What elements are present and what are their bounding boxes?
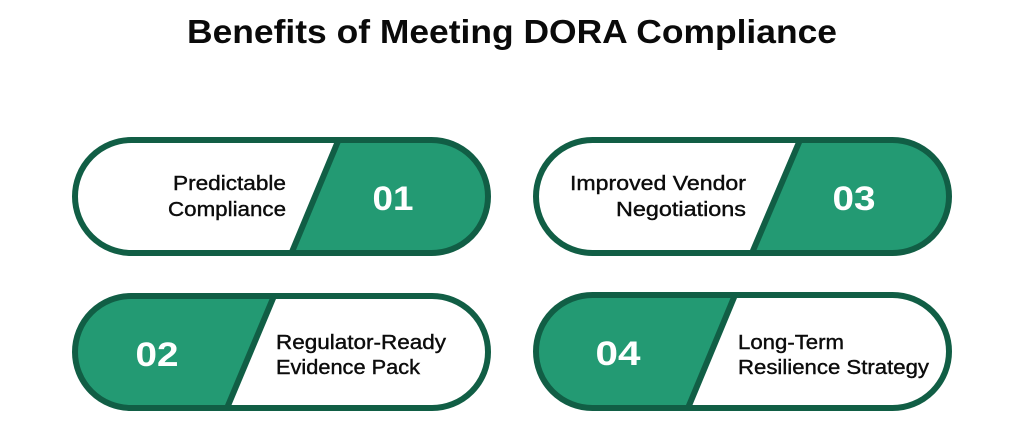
label: Regulator-Ready Evidence Pack [276,332,446,379]
label: Regulator-Ready Evidence Pack: Evidence Pack [276,357,421,379]
panel: 01 Predictable Compliance [75,140,488,253]
panel: 04 Long-Term Resilience Strategy [536,295,949,408]
label: Improved Vendor Negotiations: Negotiations [616,199,746,221]
label: Predictable Compliance: Compliance [168,199,286,221]
label: Predictable Compliance [168,173,286,221]
title: Benefits of Meeting DORA Compliance [187,13,837,50]
label: Improved Vendor Negotiations [570,173,746,221]
number 03: 03 [832,180,876,218]
panel: 03 Improved Vendor Negotiations [536,140,949,253]
label: Improved Vendor Negotiations: Improved Vendor [570,173,746,195]
label: Long-Term Resilience Strategy: Resilience Strategy [738,357,929,379]
number 02: 02 [136,336,178,374]
label: Long-Term Resilience Strategy: Long-Term [738,332,844,354]
label: Predictable Compliance: Predictable [173,173,286,195]
panel: 02 Regulator-Ready Evidence Pack [75,296,488,408]
label: Regulator-Ready Evidence Pack: Regulator-Ready [276,332,446,354]
number 01: 01 [372,180,414,218]
number 04: 04 [596,335,641,373]
label: Long-Term Resilience Strategy [738,332,929,379]
